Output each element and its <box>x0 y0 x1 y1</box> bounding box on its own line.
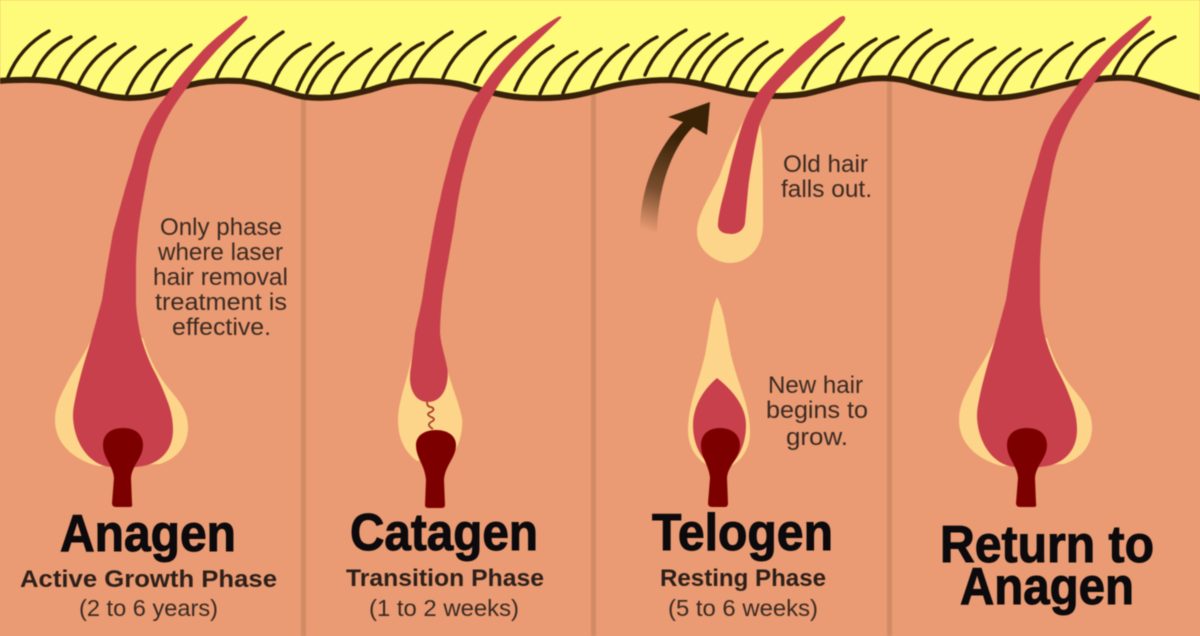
hair shaft <box>410 16 561 402</box>
note: old hair falls out <box>781 151 872 203</box>
note: only effective phase: effective. <box>172 314 271 341</box>
note: only effective phase: hair removal <box>153 264 288 291</box>
old hair shaft <box>718 16 845 234</box>
dermal papilla <box>416 430 456 508</box>
heading: Return to Anagen: Anagen <box>960 558 1134 616</box>
subheading: Resting Phase: Resting Phase <box>660 565 826 592</box>
dermal papilla <box>1007 428 1047 507</box>
yellow background above skin <box>0 0 1200 110</box>
new hair follicle sheath <box>688 297 750 467</box>
note: new hair begins to grow <box>766 372 868 451</box>
skin surface line <box>0 78 1200 98</box>
heading: Return to Anagen <box>940 516 1154 616</box>
surface hairs <box>8 30 1175 95</box>
note: only effective phase: Only phase <box>160 214 282 241</box>
old hair follicle sheath <box>697 105 763 263</box>
hair shaft and bulb <box>73 16 248 467</box>
panel: Return to Anagen <box>940 16 1154 616</box>
note: new hair begins to grow: New hair <box>768 372 863 399</box>
note: only effective phase: where laser <box>157 239 283 266</box>
note: new hair begins to grow: grow. <box>786 424 848 451</box>
duration: 2 to 6 years: (2 to 6 years) <box>79 595 218 621</box>
arrow: old hair moving out <box>640 102 710 232</box>
duration: 1 to 2 weeks: (1 to 2 weeks) <box>369 595 519 621</box>
new hair bulb <box>693 378 746 466</box>
subheading: Active Growth Phase: Active Growth Phase <box>20 566 277 593</box>
follicle sheath <box>55 338 188 466</box>
duration: 5 to 6 weeks: (5 to 6 weeks) <box>668 595 818 621</box>
hair shaft and bulb <box>977 16 1152 467</box>
note: new hair begins to grow: begins to <box>766 397 868 424</box>
panel: Anagen <box>20 16 288 621</box>
subheading: Transition Phase: Transition Phase <box>346 565 544 592</box>
heading: Telogen: Telogen <box>652 504 833 562</box>
panel dividers <box>301 80 892 636</box>
follicle sheath <box>959 338 1092 466</box>
heading: Anagen: Anagen <box>60 505 236 563</box>
panel: Catagen <box>346 16 561 621</box>
heading: Catagen: Catagen <box>350 504 538 562</box>
dermal papilla <box>701 428 740 507</box>
heading: Return to Anagen: Return to <box>940 516 1154 574</box>
note: old hair falls out: Old hair <box>783 151 868 178</box>
panel: Telogen <box>640 16 872 621</box>
connecting strand <box>427 402 434 429</box>
note: only effective phase: treatment is <box>155 289 287 316</box>
note: old hair falls out: falls out. <box>781 176 872 203</box>
dermal papilla <box>103 428 143 507</box>
follicle sheath <box>398 350 462 461</box>
note: only effective phase <box>153 214 288 341</box>
